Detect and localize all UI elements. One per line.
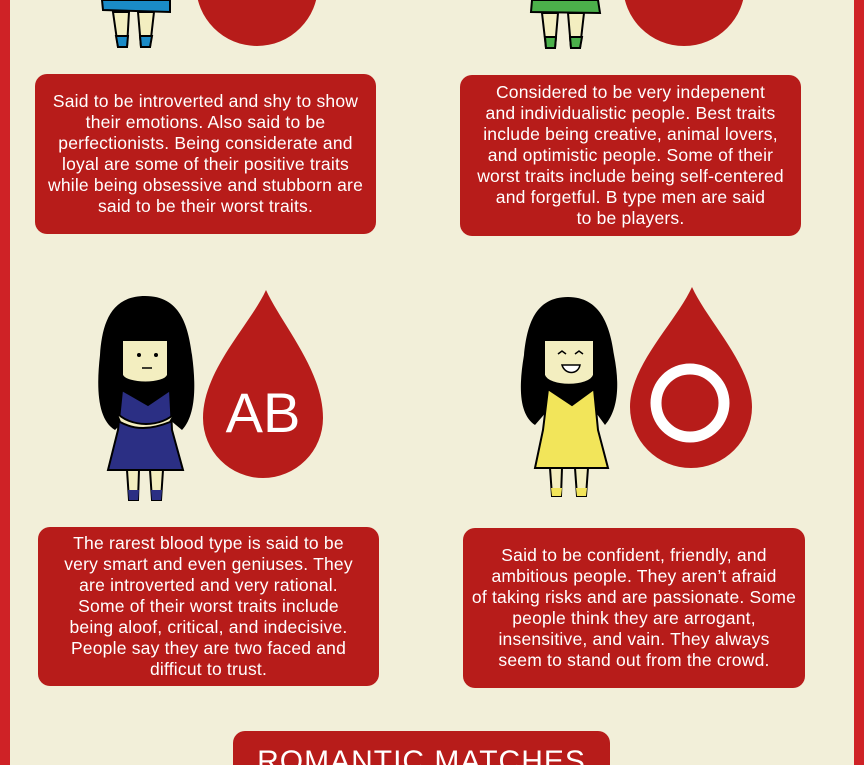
text box: B: include being creative, animal lovers,	[483, 124, 778, 144]
text box: O: Said to be confident, friendly, and	[501, 545, 767, 565]
girl: B legs	[531, 0, 600, 48]
text box: AB: Some of their worst traits include	[78, 596, 339, 616]
text box: O: seem to stand out from the crowd.	[498, 650, 770, 670]
text box: AB: difficut to trust.	[150, 659, 267, 679]
text box: A: their emotions. Also said to be	[86, 112, 325, 132]
text box: B	[460, 75, 801, 236]
text box: A: said to be their worst traits.	[98, 196, 313, 216]
text box: AB: very smart and even geniuses. They	[64, 554, 353, 574]
text box: B: and individualistic people. Best traits	[486, 103, 775, 123]
text box: O: of taking risks and are passionate. Some	[472, 587, 796, 607]
drop: O	[630, 287, 752, 468]
text box: A: loyal are some of their positive traits	[62, 154, 349, 174]
text box: B: to be players.	[577, 208, 684, 228]
text box: B: worst traits include being self-centered	[477, 166, 784, 186]
text box: O: insensitive, and vain. They always	[498, 629, 770, 649]
text box: B: Considered to be very indepenent	[496, 82, 765, 102]
girl: O	[521, 297, 617, 496]
text box: AB: The rarest blood type is said to be	[73, 533, 344, 553]
text box: AB: being aloof, critical, and indecisive.	[69, 617, 348, 637]
text box: B: and optimistic people. Some of their	[488, 145, 773, 165]
girl: AB	[98, 296, 194, 500]
drop: A	[196, 0, 318, 46]
drop: B	[623, 0, 745, 46]
text box: AB: People say they are two faced and	[71, 638, 346, 658]
text box: AB: are introverted and very rational.	[79, 575, 338, 595]
text box: A	[35, 74, 376, 234]
text box: O: ambitious people. They aren’t afraid	[491, 566, 777, 586]
text box: AB	[38, 527, 379, 686]
drop: AB	[203, 290, 323, 478]
text box: B: and forgetful. B type men are said	[496, 187, 765, 207]
text box: A: Said to be introverted and shy to show	[53, 91, 358, 111]
text box: A: perfectionists. Being considerate and	[58, 133, 353, 153]
text box: A: while being obsessive and stubborn are	[48, 175, 363, 195]
drop: AB: AB	[226, 381, 300, 444]
girl: A legs	[102, 0, 170, 47]
text box: O	[463, 528, 805, 688]
heading: romantic matches	[233, 731, 610, 765]
text box: O: people think they are arrogant,	[512, 608, 756, 628]
